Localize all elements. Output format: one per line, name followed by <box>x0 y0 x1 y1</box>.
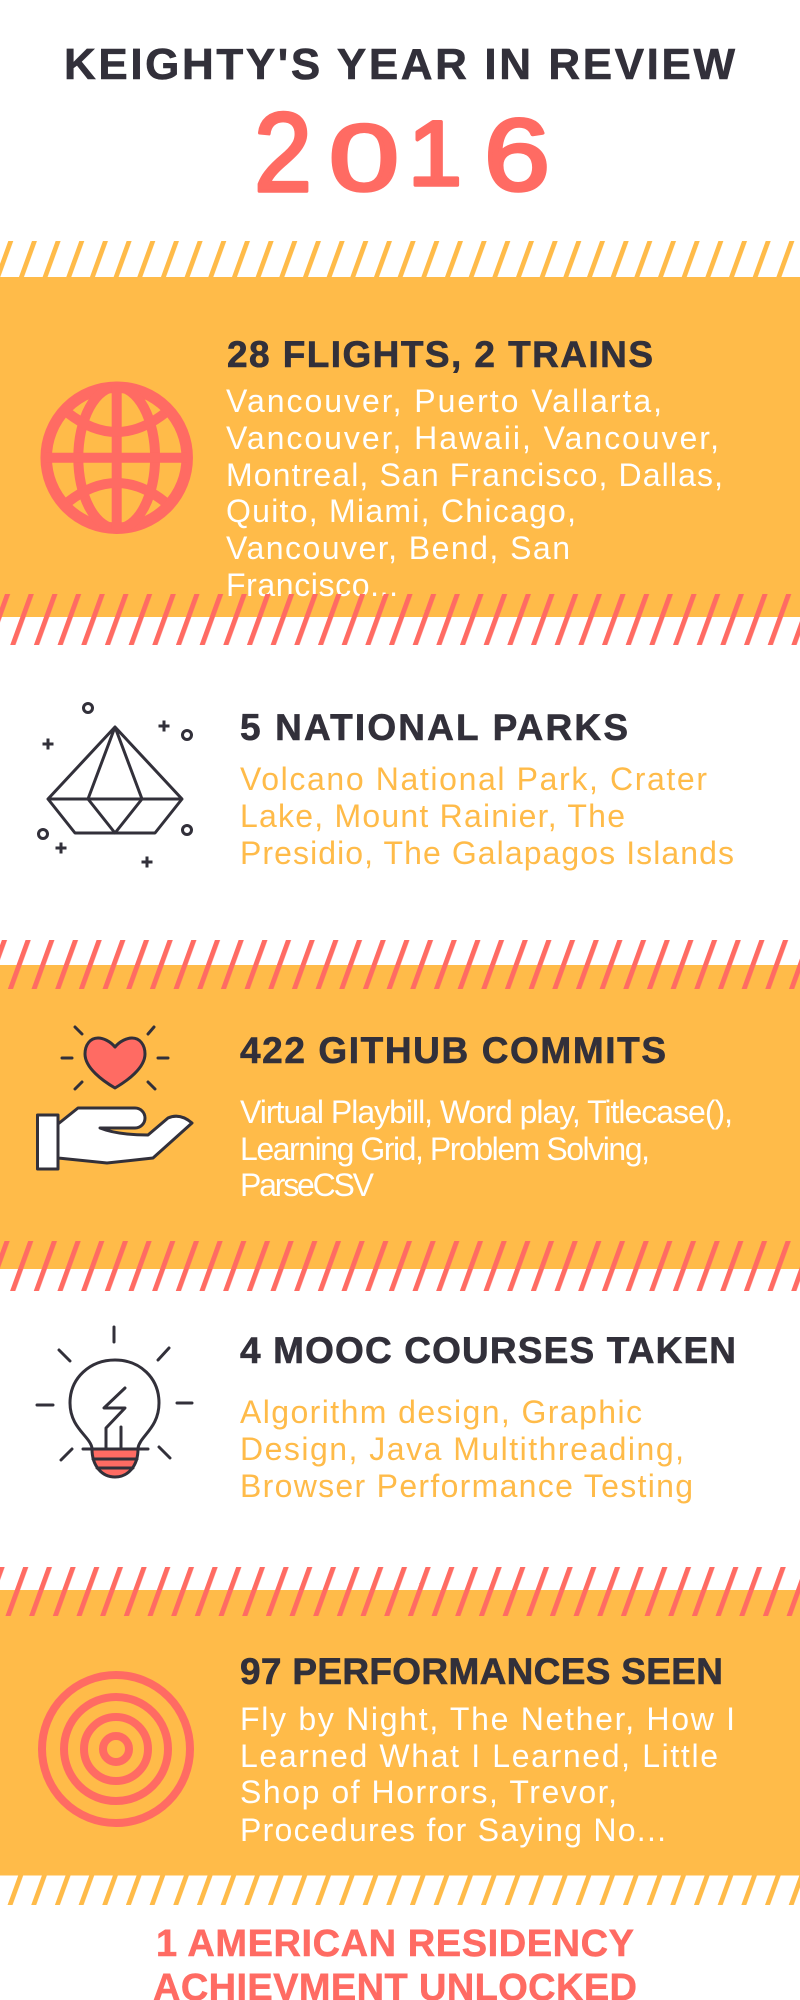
year 2016: 0 <box>329 105 399 210</box>
icon: target <box>42 1675 190 1823</box>
year 2016 <box>254 90 550 215</box>
text: flights list: Vancouver, Hawaii, Vancouver, <box>226 420 719 456</box>
text: flights list: Vancouver, Bend, San <box>226 530 570 566</box>
year 2016: 1 <box>408 103 462 205</box>
text: national parks list: Lake, Mount Rainier, The <box>240 798 625 834</box>
heading: national parks: 5 NATIONAL PARKS <box>240 707 628 748</box>
text: performances list: Shop of Horrors, Trevor, <box>240 1774 617 1810</box>
heading: flights: 28 FLIGHTS, 2 TRAINS <box>227 334 653 375</box>
closing statement: 1 AMERICAN RESIDENCY <box>156 1923 634 1965</box>
text: flights list <box>226 383 723 603</box>
panel: performances <box>0 1590 800 1876</box>
year 2016: 2 <box>254 90 312 215</box>
heading: mooc courses: 4 MOOC COURSES TAKEN <box>240 1330 736 1371</box>
icon: globe <box>46 387 187 529</box>
text: performances list <box>240 1701 735 1848</box>
title: KEIGHTY'S YEAR IN REVIEW <box>64 40 735 89</box>
icon: light bulb <box>37 1327 192 1477</box>
icon: hand with heart <box>38 1027 192 1169</box>
text: performances list: Fly by Night, The Nether, How I <box>240 1701 735 1737</box>
text: mooc list: Browser Performance Testing <box>240 1468 693 1504</box>
text: flights list: Francisco... <box>226 567 398 603</box>
year 2016: 6 <box>484 98 550 212</box>
text: flights list: Quito, Miami, Chicago, <box>226 493 576 529</box>
text: mooc list: Algorithm design, Graphic <box>240 1394 642 1430</box>
text: performances list: Learned What I Learned, Little <box>240 1738 718 1774</box>
closing statement <box>153 1923 637 2000</box>
text: flights list: Montreal, San Francisco, Dallas, <box>226 457 723 493</box>
text: github list: ParseCSV <box>240 1167 375 1203</box>
text: national parks list: Volcano National Park, Crater <box>240 761 707 797</box>
text: flights list: Vancouver, Puerto Vallarta, <box>226 383 662 419</box>
panel: github <box>0 965 800 1269</box>
panel: flights <box>0 277 800 617</box>
text: github list <box>240 1094 733 1203</box>
text: mooc list <box>240 1394 693 1504</box>
icon: diamond <box>38 704 192 868</box>
text: mooc list: Design, Java Multithreading, <box>240 1431 684 1467</box>
text: national parks list <box>240 761 734 871</box>
panel: national parks <box>38 704 734 871</box>
panel: mooc courses <box>37 1327 736 1504</box>
text: github list: Learning Grid, Problem Solving, <box>240 1131 650 1167</box>
text: national parks list: Presidio, The Galapagos Islands <box>240 835 734 871</box>
heading: performances: 97 PERFORMANCES SEEN <box>240 1651 723 1692</box>
heading: github: 422 GITHUB COMMITS <box>240 1030 666 1071</box>
text: performances list: Procedures for Saying No... <box>240 1812 666 1848</box>
text: github list: Virtual Playbill, Word play, Titlecase(), <box>240 1094 733 1130</box>
